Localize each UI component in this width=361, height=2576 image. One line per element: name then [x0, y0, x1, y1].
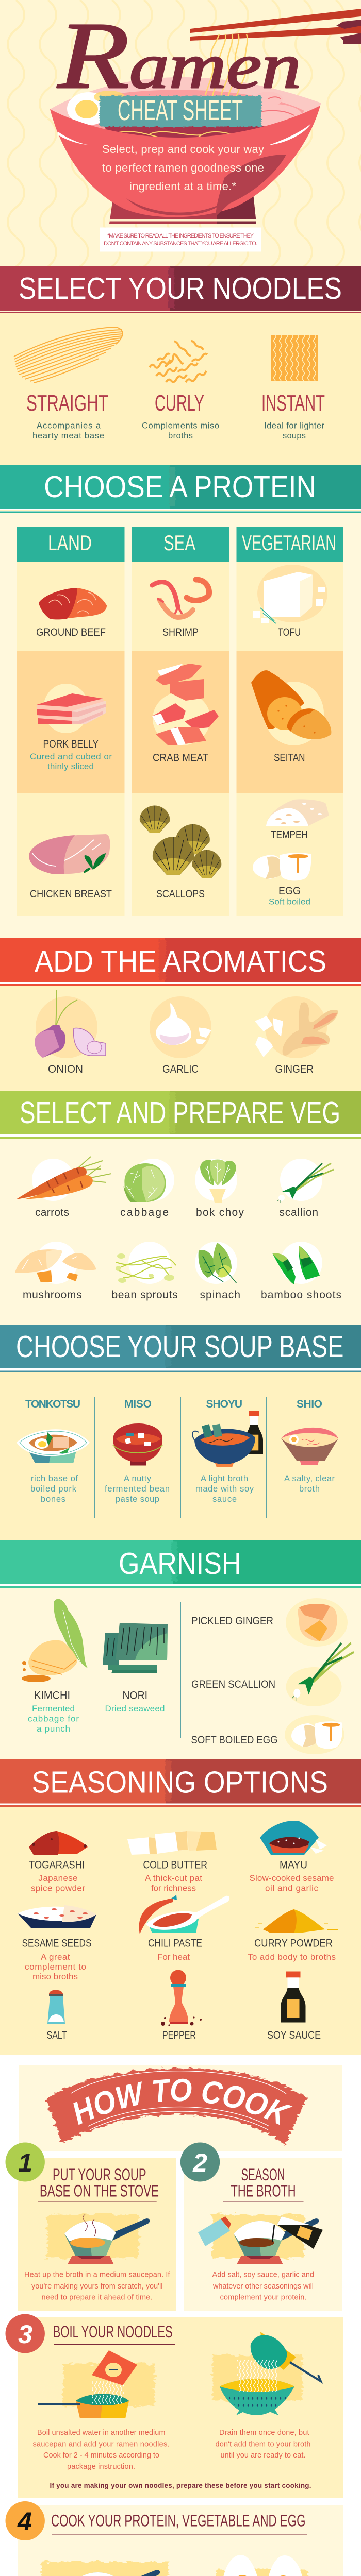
- icon: ground beef: [39, 588, 107, 619]
- step 3 text: [33, 2429, 310, 2471]
- step 3 text: don't add them to your broth: [216, 2440, 310, 2448]
- seasoning notes row 1: Slow-cooked sesame: [250, 1873, 334, 1883]
- soup descriptions: broth: [299, 1484, 320, 1494]
- panel: seasoning: CHILI PASTE: [148, 1937, 202, 1950]
- icon: soft boiled egg: [291, 1721, 342, 1749]
- icon: cabbage: [124, 1163, 166, 1202]
- soup descriptions: A light broth: [201, 1474, 248, 1483]
- panel: soup base: MISO: [124, 1398, 152, 1410]
- icon: pork belly: [37, 693, 106, 724]
- icon: scallops: [140, 806, 221, 878]
- soup descriptions: paste soup: [116, 1495, 159, 1504]
- badge: 2: 2: [192, 2148, 207, 2177]
- illustration: protein and veg pan: [30, 2562, 177, 2576]
- icon: soft boiled egg: [253, 853, 311, 880]
- seasoning notes row 2: [25, 1952, 336, 1981]
- step 2 text: [212, 2271, 314, 2302]
- icon: pickled ginger: [298, 1604, 337, 1641]
- heading: select and prepare veg: [0, 1091, 361, 1139]
- noodle descriptions: Complements miso: [142, 421, 219, 431]
- vegetable labels: [23, 1207, 341, 1301]
- icon: nori: [103, 1623, 168, 1673]
- column: vegetarian: Soft boiled: [269, 896, 310, 907]
- intro text: ingredient at a time.*: [129, 180, 236, 193]
- noodle type labels: CURLY: [155, 391, 204, 416]
- icon: tempeh: [266, 799, 329, 826]
- badge: 1: 1: [18, 2148, 32, 2177]
- icon: carrots: [16, 1157, 111, 1199]
- heading: garnish: GARNISH: [119, 1547, 241, 1581]
- column: sea: SEA: [163, 531, 195, 555]
- noodle descriptions: [32, 421, 325, 440]
- icon: spinach: [199, 1243, 237, 1283]
- icon: onion: [35, 990, 106, 1058]
- label: cheat sheet: [100, 94, 261, 127]
- vegetable labels: spinach: [200, 1289, 240, 1301]
- intro text: to perfect ramen goodness one: [102, 161, 264, 174]
- noodle type labels: STRAIGHT: [26, 391, 108, 416]
- heading: choose your soup base: [0, 1325, 361, 1372]
- aromatic labels: [48, 1063, 314, 1075]
- seasoning notes row 1: oil and garlic: [265, 1884, 319, 1893]
- heading: garnish: [0, 1540, 361, 1588]
- panel: garnish: PICKLED GINGER: [191, 1615, 273, 1627]
- badge: 1: [5, 2142, 45, 2181]
- ribbon: how to cook: HOW TO COOK: [73, 2078, 293, 2125]
- seasoning notes row 2: To add body to broths: [248, 1952, 336, 1962]
- panel: step 1: PUT YOUR SOUP: [53, 2165, 146, 2184]
- ribbon: how to cook: [45, 2067, 308, 2146]
- step 1 text: need to prepare it ahead of time.: [41, 2294, 153, 2302]
- icon: garlic: [156, 1003, 211, 1045]
- aromatic labels: ONION: [48, 1063, 83, 1075]
- panel: garnish: [0, 1588, 361, 1759]
- vegetable labels: scallion: [280, 1207, 318, 1218]
- step 1 text: you're making yours from scratch, you'll: [31, 2282, 163, 2291]
- soup descriptions: sauce: [212, 1495, 237, 1504]
- icon: soy sauce: [281, 1971, 305, 2023]
- allergy note: DON'T CONTAIN ANY SUBSTANCES THAT YOU ARE ALLERGIC TO.: [104, 241, 257, 247]
- panel: seasoning: MAYU: [280, 1859, 307, 1871]
- hero: ramen cheat sheet: [0, 0, 361, 313]
- heading: add the aromatics: ADD THE AROMATICS: [35, 944, 326, 978]
- noodle descriptions: Accompanies a: [37, 421, 101, 431]
- column: vegetarian: EGG: [278, 885, 301, 897]
- heading: seasoning options: SEASONING OPTIONS: [32, 1765, 328, 1799]
- illustration: seasoning the broth: [198, 2214, 323, 2264]
- panel: soup base: TONKOTSU: [25, 1398, 80, 1410]
- icon: bowl base: [109, 194, 256, 224]
- column: land: PORK BELLY: [43, 738, 99, 750]
- noodle descriptions: soups: [283, 431, 306, 440]
- noodle descriptions: Ideal for lighter: [264, 421, 325, 431]
- column: sea: SHRIMP: [162, 626, 199, 638]
- icon: salt: [47, 1990, 65, 2024]
- panel: seasoning: SESAME SEEDS: [22, 1937, 92, 1950]
- icon: straight noodles: [14, 327, 123, 383]
- noodle descriptions: hearty meat base: [32, 431, 104, 440]
- heading: choose a protein: CHOOSE A PROTEIN: [44, 470, 316, 504]
- panel: garnish: GREEN SCALLION: [191, 1679, 275, 1690]
- icon: chopsticks: [190, 9, 361, 44]
- icon: shrimp: [152, 580, 209, 617]
- illustration: noodles into pot: [38, 2350, 155, 2418]
- garnish notes: Fermented: [32, 1704, 75, 1714]
- seasoning notes row 2: For heat: [157, 1952, 190, 1962]
- icon: mayu: [260, 1821, 327, 1855]
- column: land: Cured and cubed or: [30, 752, 112, 761]
- heading: select your noodles: [0, 266, 361, 313]
- garnish notes: a punch: [37, 1724, 70, 1734]
- icon: cold butter: [127, 1831, 217, 1855]
- heading: choose a protein: [0, 465, 361, 513]
- seasoning notes row 1: for richness: [151, 1884, 196, 1893]
- icon: miso bowl: [113, 1423, 162, 1465]
- seasoning notes row 1: Japanese: [38, 1873, 77, 1883]
- icon: bok choy: [200, 1159, 236, 1203]
- panel: aromatics: [0, 986, 361, 1091]
- icon: instant noodles: [271, 335, 318, 381]
- column: land: [17, 527, 125, 916]
- panel: step 4: [5, 2501, 343, 2576]
- step 2 text: complement your protein.: [220, 2294, 306, 2302]
- panel: seasoning: CURRY POWDER: [254, 1937, 333, 1950]
- icon: curly noodles: [150, 341, 207, 382]
- panel: step 1: BASE ON THE STOVE: [40, 2181, 159, 2200]
- intro text: Select, prep and cook your way: [102, 143, 264, 156]
- seasoning notes row 2: complement to: [25, 1962, 86, 1972]
- icon: togarashi: [29, 1831, 88, 1855]
- vegetable labels: mushrooms: [23, 1289, 81, 1301]
- column: vegetarian: SEITAN: [274, 752, 305, 764]
- panel: step 2: SEASON: [241, 2165, 285, 2184]
- column: land: CHICKEN BREAST: [30, 888, 112, 900]
- panel: protein: [0, 513, 361, 938]
- icon: sesame seeds: [18, 1905, 96, 1928]
- illustration: saucepan with broth: [47, 2214, 150, 2264]
- panel: soup base: SHIO: [297, 1398, 322, 1410]
- heading: seasoning options: [0, 1759, 361, 1807]
- step 2 text: whatever other seasonings will: [212, 2282, 314, 2291]
- label: cheat sheet: CHEAT SHEET: [118, 94, 243, 126]
- soup descriptions: boiled pork: [30, 1484, 77, 1494]
- icon: pepper: [161, 1970, 202, 2026]
- icon: green scallion: [292, 1643, 354, 1701]
- step 3 text: Boil unsalted water in another medium: [37, 2429, 165, 2437]
- panel: seasoning: SALT: [46, 2029, 67, 2041]
- icon: bamboo shoots: [272, 1246, 320, 1284]
- icon: ginger: [255, 1002, 338, 1057]
- step 3 tip: If you are making your own noodles, prepare these before you start cooking.: [50, 2482, 311, 2489]
- badge: 3: [5, 2314, 45, 2353]
- soup descriptions: [30, 1474, 335, 1504]
- icon: curry powder: [255, 1909, 338, 1933]
- panel: noodles: [0, 313, 361, 465]
- step 2 text: Add salt, soy sauce, garlic and: [212, 2271, 314, 2279]
- column: vegetarian: TEMPEH: [271, 829, 308, 841]
- column: sea: SCALLOPS: [156, 888, 205, 900]
- step 1 text: Heat up the broth in a medium saucepan. If: [24, 2271, 170, 2279]
- heading: add the aromatics: [0, 938, 361, 986]
- panel: garnish: NORI: [123, 1690, 147, 1701]
- panel: step 2: [180, 2142, 342, 2311]
- step 3 text: package instruction.: [67, 2463, 135, 2471]
- vegetable labels: bok choy: [196, 1207, 244, 1218]
- panel: seasoning: PEPPER: [162, 2029, 196, 2041]
- soup descriptions: A nutty: [124, 1474, 152, 1483]
- panel: step 1: [5, 2142, 176, 2311]
- step 3 text: saucepan and add your ramen noodles.: [33, 2440, 169, 2448]
- panel: seasoning: [0, 1807, 361, 2055]
- icon: ramen bowl: [50, 77, 321, 217]
- step 1 text: [24, 2271, 170, 2302]
- column: vegetarian: [236, 527, 343, 916]
- icon: chicken breast: [29, 834, 110, 874]
- icon: hanging noodles: [205, 34, 248, 98]
- garnish notes: Dried seaweed: [105, 1704, 165, 1714]
- soup descriptions: A salty, clear: [284, 1474, 335, 1483]
- badge: 3: 3: [18, 2320, 32, 2349]
- noodle type labels: [26, 391, 325, 416]
- icon: kimchi: [22, 1599, 88, 1682]
- seasoning notes row 2: A great: [41, 1952, 70, 1962]
- step 3 text: Cook for 2 - 4 minutes according to: [43, 2451, 159, 2460]
- icon: tofu: [253, 572, 325, 623]
- garnish notes: [28, 1704, 165, 1734]
- title: Ramen: Ramen: [57, 3, 301, 109]
- panel: step 2: THE BROTH: [231, 2181, 296, 2200]
- aromatic labels: GARLIC: [162, 1063, 199, 1075]
- column: land: LAND: [48, 531, 92, 555]
- allergy note: *MAKE SURE TO READ ALL THE INGREDIENTS TO ENSURE THEY: [107, 233, 254, 239]
- column: sea: CRAB MEAT: [153, 752, 208, 764]
- badge: 4: 4: [17, 2507, 32, 2536]
- panel: how to cook: [19, 2065, 342, 2151]
- seasoning notes row 1: spice powder: [31, 1884, 85, 1893]
- icon: chili paste: [139, 1895, 229, 1934]
- icon: tonkotsu bowl: [17, 1429, 90, 1463]
- panel: seasoning: TOGARASHI: [29, 1859, 85, 1871]
- column: land: thinly sliced: [47, 761, 94, 771]
- noodle descriptions: broths: [168, 431, 193, 440]
- allergy note: [100, 228, 261, 251]
- soup descriptions: bones: [41, 1495, 65, 1504]
- panel: seasoning: SOY SAUCE: [267, 2029, 321, 2041]
- step 3 text: until you are ready to eat.: [221, 2451, 305, 2460]
- panel: seasoning: COLD BUTTER: [143, 1859, 207, 1871]
- panel: soup base: [0, 1372, 361, 1540]
- icon: shoyu bowl: [192, 1411, 263, 1467]
- icon: bean sprouts: [116, 1253, 176, 1283]
- panel: vegetables: [0, 1139, 361, 1325]
- vegetable labels: bean sprouts: [111, 1289, 177, 1301]
- vegetable labels: carrots: [35, 1207, 69, 1218]
- column: land: GROUND BEEF: [36, 626, 106, 638]
- panel: garnish: KIMCHI: [34, 1690, 70, 1701]
- vegetable labels: cabbage: [120, 1207, 169, 1218]
- panel: step 3: [5, 2314, 343, 2498]
- step 3 text: Drain them once done, but: [219, 2429, 309, 2437]
- column: vegetarian: TOFU: [278, 626, 301, 638]
- icon: mushrooms: [15, 1249, 96, 1282]
- panel: garnish: SOFT BOILED EGG: [191, 1734, 277, 1746]
- soup descriptions: made with soy: [195, 1484, 254, 1494]
- badge: 4: [5, 2501, 45, 2540]
- soup descriptions: fermented bean: [105, 1484, 170, 1494]
- intro text: [102, 143, 264, 193]
- badge: 2: [180, 2142, 220, 2181]
- vegetable labels: bamboo shoots: [261, 1289, 341, 1301]
- panel: soup base: SHOYU: [206, 1398, 242, 1410]
- soup descriptions: rich base of: [31, 1474, 78, 1483]
- noodle type labels: INSTANT: [261, 391, 325, 416]
- column: sea: [132, 527, 229, 916]
- icon: seitan: [251, 670, 331, 739]
- icon: crab meat: [152, 664, 219, 745]
- panel: step 3: BOIL YOUR NOODLES: [53, 2323, 173, 2341]
- garnish notes: cabbage for: [28, 1714, 79, 1724]
- illustration: draining noodles: [212, 2332, 321, 2415]
- icon: scallion: [277, 1163, 334, 1203]
- aromatic labels: GINGER: [275, 1063, 314, 1075]
- seasoning notes row 1: A thick-cut pat: [145, 1873, 202, 1883]
- seasoning notes row 1: [31, 1873, 334, 1893]
- illustration: halved eggs: [216, 2555, 308, 2576]
- seasoning notes row 2: miso broths: [32, 1972, 78, 1981]
- icon: shio bowl: [281, 1428, 338, 1465]
